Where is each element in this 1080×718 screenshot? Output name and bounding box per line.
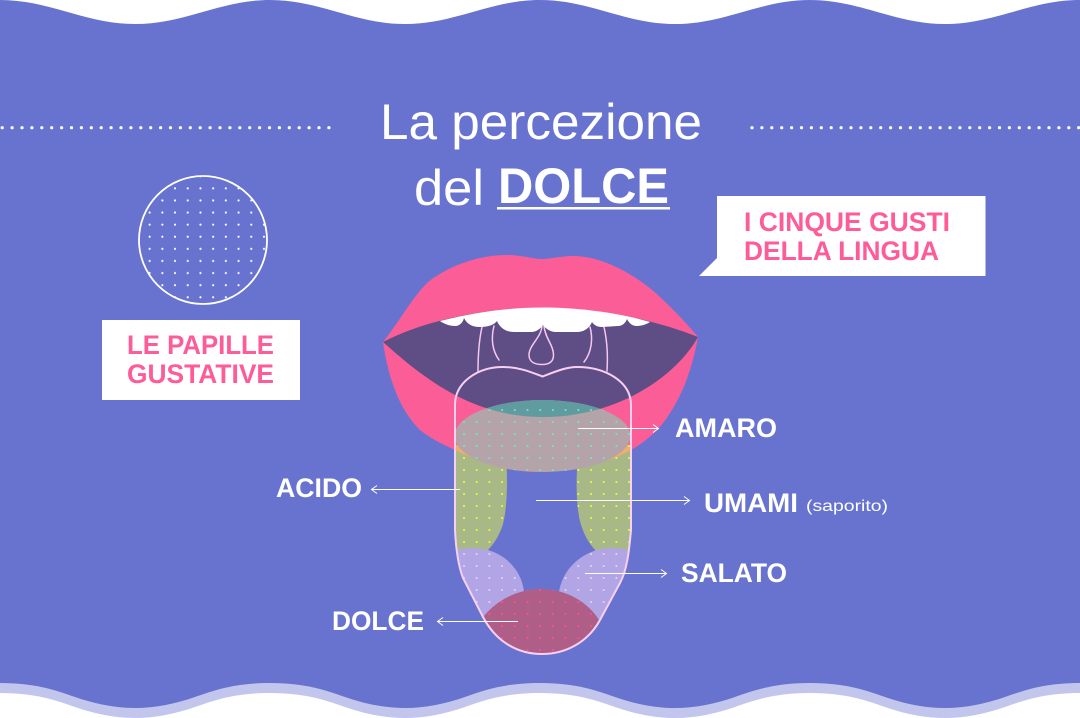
taste zone: salato lilac bbox=[458, 548, 628, 620]
callout: le papille gustative: LE PAPILLE bbox=[127, 330, 274, 360]
label: umami: UMAMI bbox=[704, 488, 798, 518]
callout: i cinque gusti della lingua bbox=[699, 196, 986, 276]
callout: le papille gustative bbox=[102, 320, 300, 400]
label: dolce: DOLCE bbox=[332, 606, 424, 636]
label: acido bbox=[276, 473, 460, 503]
tongue outline bbox=[455, 367, 631, 654]
mouth cavity bbox=[383, 308, 698, 417]
label: umami bbox=[536, 488, 888, 518]
title: La percezione bbox=[380, 94, 702, 150]
callout: i cinque gusti della lingua: I CINQUE GUSTI bbox=[744, 207, 950, 237]
taste zone: dolce bbox=[484, 589, 599, 660]
label: umami: (saporito) bbox=[806, 498, 888, 515]
callout: i cinque gusti della lingua: DELLA LINGUA bbox=[744, 236, 939, 266]
label: dolce bbox=[332, 606, 518, 636]
label: acido: ACIDO bbox=[276, 473, 362, 503]
title: DOLCE bbox=[498, 158, 669, 214]
title bbox=[380, 94, 702, 216]
icon: taste bud circle bbox=[139, 176, 267, 304]
label: amaro: AMARO bbox=[675, 413, 777, 443]
dotted rule left bbox=[2, 126, 335, 129]
lips bbox=[383, 255, 698, 472]
label: amaro bbox=[578, 413, 777, 443]
callout: le papille gustative: GUSTATIVE bbox=[127, 359, 274, 389]
teeth bbox=[440, 308, 650, 332]
dotted rule right bbox=[752, 126, 1080, 129]
tongue bbox=[450, 367, 635, 660]
label: salato bbox=[585, 558, 787, 588]
throat lines bbox=[478, 326, 607, 372]
taste zone: acido / umami green bbox=[456, 445, 630, 550]
mouth bbox=[383, 255, 698, 472]
label: salato: SALATO bbox=[681, 558, 787, 588]
taste zone: amaro bbox=[454, 400, 630, 472]
title: del bbox=[414, 160, 484, 216]
